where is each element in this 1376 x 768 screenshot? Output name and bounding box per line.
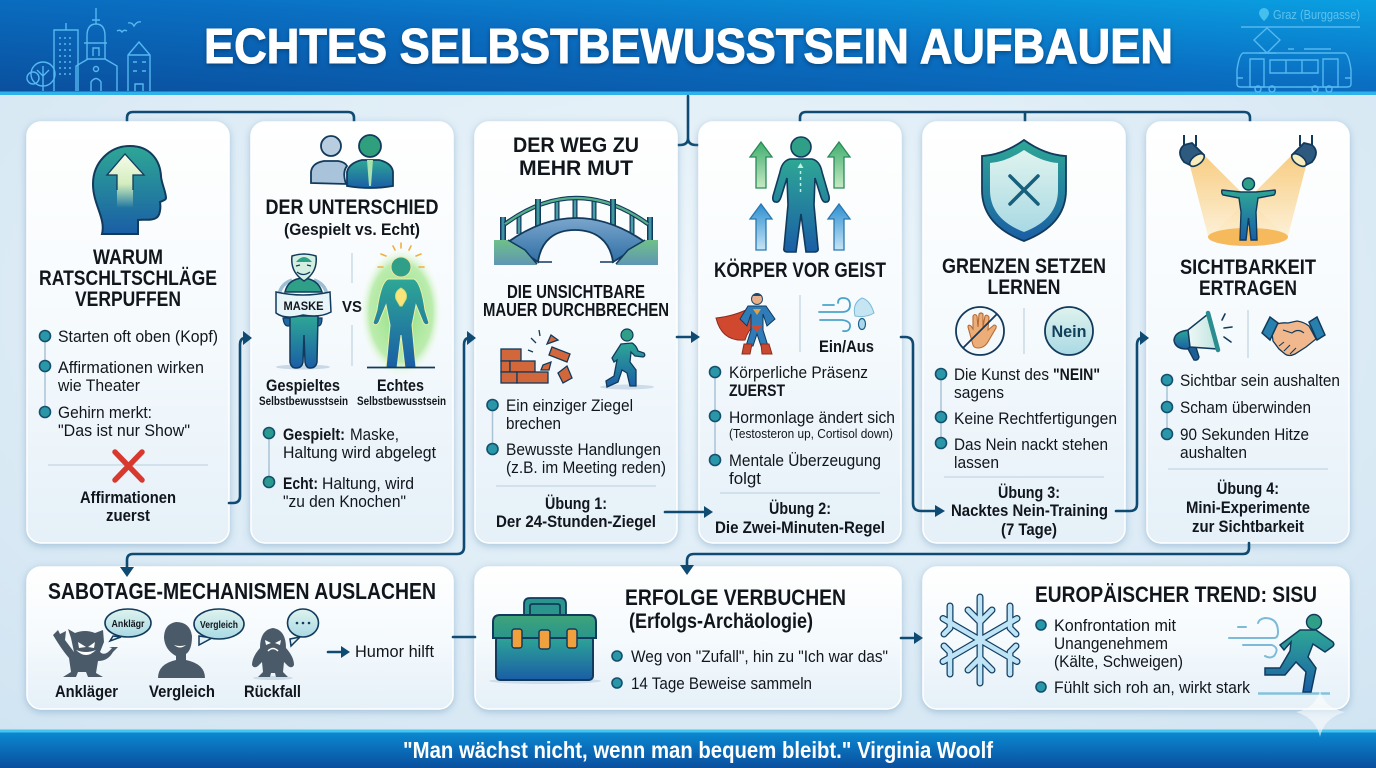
bullet list xyxy=(612,647,888,693)
bullet list xyxy=(1036,616,1250,697)
caption: Affirmationen xyxy=(80,489,176,507)
exercise 4: zur Sichtbarkeit xyxy=(1192,518,1304,536)
bullet list: ZUERST xyxy=(729,381,786,400)
bullet list: Echt: xyxy=(283,474,318,493)
bullet list xyxy=(936,365,1117,472)
heading: WARUM xyxy=(93,246,163,269)
figure labels: Rückfall xyxy=(244,683,301,701)
figure labels: Echtes xyxy=(377,377,424,395)
connector: card 1 to card 2 xyxy=(229,331,252,503)
bullet list xyxy=(264,425,436,511)
heading xyxy=(942,255,1106,299)
panel: sisu xyxy=(923,567,1349,709)
bullet list xyxy=(710,363,895,488)
panel: koerper vor geist xyxy=(699,122,901,543)
icon: nein badge: Nein xyxy=(1052,322,1086,341)
icon: tram xyxy=(1237,27,1360,92)
exercise 4: Mini-Experimente xyxy=(1186,499,1310,517)
bullet list: Konfrontation mit xyxy=(1054,616,1176,635)
exercise 3: (7 Tage) xyxy=(1001,521,1057,539)
exercise 2 xyxy=(715,499,885,537)
icon: glowing figure xyxy=(359,243,443,378)
heading: DER UNTERSCHIED xyxy=(266,196,438,219)
heading: ERFOLGE VERBUCHEN xyxy=(625,585,846,610)
icon: body with arrows xyxy=(750,137,850,252)
panel: unterschied xyxy=(251,122,453,543)
bullet list xyxy=(1162,371,1340,462)
icon: shield xyxy=(982,140,1066,241)
bullet list: Keine Rechtfertigungen xyxy=(954,409,1117,428)
icon: stop hand xyxy=(956,307,1004,355)
heading xyxy=(1180,256,1316,300)
bullet list: (Kälte, Schweigen) xyxy=(1054,652,1183,671)
connector: card 4 to exercise 3 xyxy=(901,337,945,517)
heading: LERNEN xyxy=(988,276,1060,299)
icon: nein badge xyxy=(1045,307,1093,355)
heading: SABOTAGE-MECHANISMEN AUSLACHEN xyxy=(48,578,436,604)
location label: Graz (Burggasse) xyxy=(1273,8,1360,22)
bullet list: aushalten xyxy=(1180,443,1247,462)
heading xyxy=(266,196,438,239)
bullet list: Mentale Überzeugung xyxy=(729,451,881,470)
bullet list: "zu den Knochen" xyxy=(283,492,406,511)
icon: masked figure: MASKE xyxy=(284,299,324,313)
connector: sabotage to erfolge xyxy=(453,636,475,638)
bullet list: Körperliche Präsenz xyxy=(729,363,868,382)
speech bubble: rueckfall xyxy=(288,609,318,646)
connector: header tee xyxy=(677,96,699,145)
bullet list: Unangenehmem xyxy=(1054,634,1168,653)
connector: top left bracket xyxy=(127,112,354,122)
figure labels: Vergleich xyxy=(149,683,215,701)
connector: exercise 1 to 2 xyxy=(665,506,713,518)
bullet list: Haltung, wird xyxy=(322,474,414,493)
bullet list xyxy=(40,327,218,440)
vs label: VS xyxy=(342,299,362,316)
panel: grenzen setzen xyxy=(923,122,1125,543)
heading: SICHTBARKEIT xyxy=(1180,256,1316,279)
bullet list: brechen xyxy=(506,414,561,433)
heading: EUROPÄISCHER TREND: SISU xyxy=(1035,582,1317,607)
connector: top right bracket xyxy=(800,112,1250,122)
bullet list: Das Nein nackt stehen xyxy=(954,435,1108,454)
heading: RATSCHLTSCHLÄGE xyxy=(39,267,217,290)
watermark star xyxy=(1296,690,1345,737)
icon: comparison bust xyxy=(158,622,205,678)
speech bubble: anklaeger xyxy=(105,609,151,641)
bullet list: sagens xyxy=(954,383,1004,402)
heading: GRENZEN SETZEN xyxy=(942,255,1106,278)
connector: exercise 3 to card 6 xyxy=(1116,331,1149,511)
exercise 3 xyxy=(951,483,1108,539)
speech bubble: vergleich: Vergleich xyxy=(200,619,238,631)
icon: runner in wind xyxy=(1229,614,1334,694)
arrow and humor text: Humor hilft xyxy=(355,642,434,661)
breath label: Ein/Aus xyxy=(819,338,874,356)
subheading: DIE UNSICHTBARE xyxy=(507,282,645,302)
exercise 2: Übung 2: xyxy=(769,499,831,518)
icon: walking person xyxy=(600,329,654,390)
panel: sichtbarkeit xyxy=(1147,122,1349,543)
subheading xyxy=(483,282,669,320)
heading xyxy=(625,585,846,633)
exercise 1: Der 24-Stunden-Ziegel xyxy=(496,513,656,531)
title: ECHTES SELBSTBEWUSSTSEIN AUFBAUEN xyxy=(204,20,1173,74)
icon: head with arrow xyxy=(93,146,166,234)
bullet list: Haltung wird abgelegt xyxy=(283,443,436,462)
heading xyxy=(513,134,639,180)
header banner xyxy=(0,0,1376,95)
figure labels: Gespieltes xyxy=(266,377,340,395)
icon: bridge xyxy=(494,197,658,265)
panel: weg zu mehr mut xyxy=(475,122,677,543)
exercise 1: Übung 1: xyxy=(545,494,607,513)
heading: VERPUFFEN xyxy=(75,288,181,311)
heading: ERTRAGEN xyxy=(1199,277,1297,300)
exercise 2: Die Zwei-Minuten-Regel xyxy=(715,519,885,537)
quote: "Man wächst nicht, wenn man bequem bleibt." Virginia Woolf xyxy=(403,737,993,763)
caption: zuerst xyxy=(106,507,150,525)
bullet list: 90 Sekunden Hitze xyxy=(1180,425,1309,444)
speech bubble: anklaeger: Anklägr xyxy=(112,618,144,630)
bullet list: Sichtbar sein aushalten xyxy=(1180,371,1340,390)
connector: card 3 to card 4 xyxy=(677,331,700,343)
icon: red cross xyxy=(115,452,142,480)
bullet list: lassen xyxy=(954,453,999,472)
icon: snowflake xyxy=(943,597,1017,683)
panel: warum xyxy=(27,122,229,543)
icon: relapse creature xyxy=(252,628,294,680)
icon: accuser devil xyxy=(53,629,118,677)
connector: sabotage loop xyxy=(120,331,476,577)
icon: handshake xyxy=(1262,317,1325,356)
icon: toolbox xyxy=(489,598,601,684)
icon: superhero xyxy=(716,293,775,354)
exercise 1 xyxy=(496,494,656,531)
icon: masked figure xyxy=(276,254,331,370)
bullet list xyxy=(487,396,666,477)
icon: breath xyxy=(819,298,874,331)
bullet list: (z.B. im Meeting reden) xyxy=(506,458,666,477)
figure labels xyxy=(55,683,301,701)
footer banner xyxy=(0,730,1376,768)
bullet list: Die Kunst des xyxy=(954,365,1049,384)
bullet list: Gehirn merkt: xyxy=(58,403,152,422)
exercise 4: Übung 4: xyxy=(1217,479,1279,498)
icon: megaphone xyxy=(1174,313,1232,360)
heading: (Erfolgs-Archäologie) xyxy=(629,610,813,633)
icon: city skyline xyxy=(27,8,150,91)
figure labels: Ankläger xyxy=(55,683,119,701)
bullet list: Gespielt: xyxy=(283,425,345,444)
figure labels xyxy=(259,377,446,408)
connector: card 6 to bottom row xyxy=(680,543,1249,575)
bullet list: Fühlt sich roh an, wirkt stark xyxy=(1054,678,1250,697)
heading: MEHR MUT xyxy=(519,157,633,180)
bullet list: "Das ist nur Show" xyxy=(58,421,190,440)
icon: spotlights on figure xyxy=(1180,135,1316,246)
icon: breaking bricks xyxy=(501,330,572,383)
bullet list: Weg von "Zufall", hin zu "Ich war das" xyxy=(631,647,888,666)
figure labels: Selbstbewusstsein xyxy=(259,396,348,408)
bullet list: folgt xyxy=(729,469,761,488)
connector: erfolge to sisu xyxy=(901,632,923,644)
vs label xyxy=(342,253,362,366)
exercise 4 xyxy=(1186,479,1310,536)
panel: sabotage xyxy=(27,567,453,709)
exercise 3: Nacktes Nein-Training xyxy=(951,502,1108,520)
bullet list: Ein einziger Ziegel xyxy=(506,396,633,415)
bullet list: Scham überwinden xyxy=(1180,398,1311,417)
bullet list: Hormonlage ändert sich xyxy=(729,408,895,427)
subheading: MAUER DURCHBRECHEN xyxy=(483,300,669,320)
bullet list: wie Theater xyxy=(57,376,140,395)
figure labels: Selbstbewusstsein xyxy=(357,396,446,408)
heading xyxy=(39,246,217,311)
bullet list: 14 Tage Beweise sammeln xyxy=(631,674,812,693)
bullet list: (Testosteron up, Cortisol down) xyxy=(729,427,893,441)
caption xyxy=(80,489,176,525)
bullet list: Maske, xyxy=(350,425,399,444)
bullet list: "NEIN" xyxy=(1053,365,1100,384)
icon: two people xyxy=(311,135,393,188)
heading: (Gespielt vs. Echt) xyxy=(284,221,420,239)
speech bubble: vergleich xyxy=(194,609,244,645)
bullet list: Affirmationen wirken xyxy=(58,358,204,377)
bullet list: Bewusste Handlungen xyxy=(506,440,661,459)
heading: DER WEG ZU xyxy=(513,134,639,157)
exercise 3: Übung 3: xyxy=(998,483,1060,502)
panel: erfolge verbuchen xyxy=(475,567,901,709)
heading: KÖRPER VOR GEIST xyxy=(714,259,886,282)
bullet list: Starten oft oben (Kopf) xyxy=(58,327,218,346)
